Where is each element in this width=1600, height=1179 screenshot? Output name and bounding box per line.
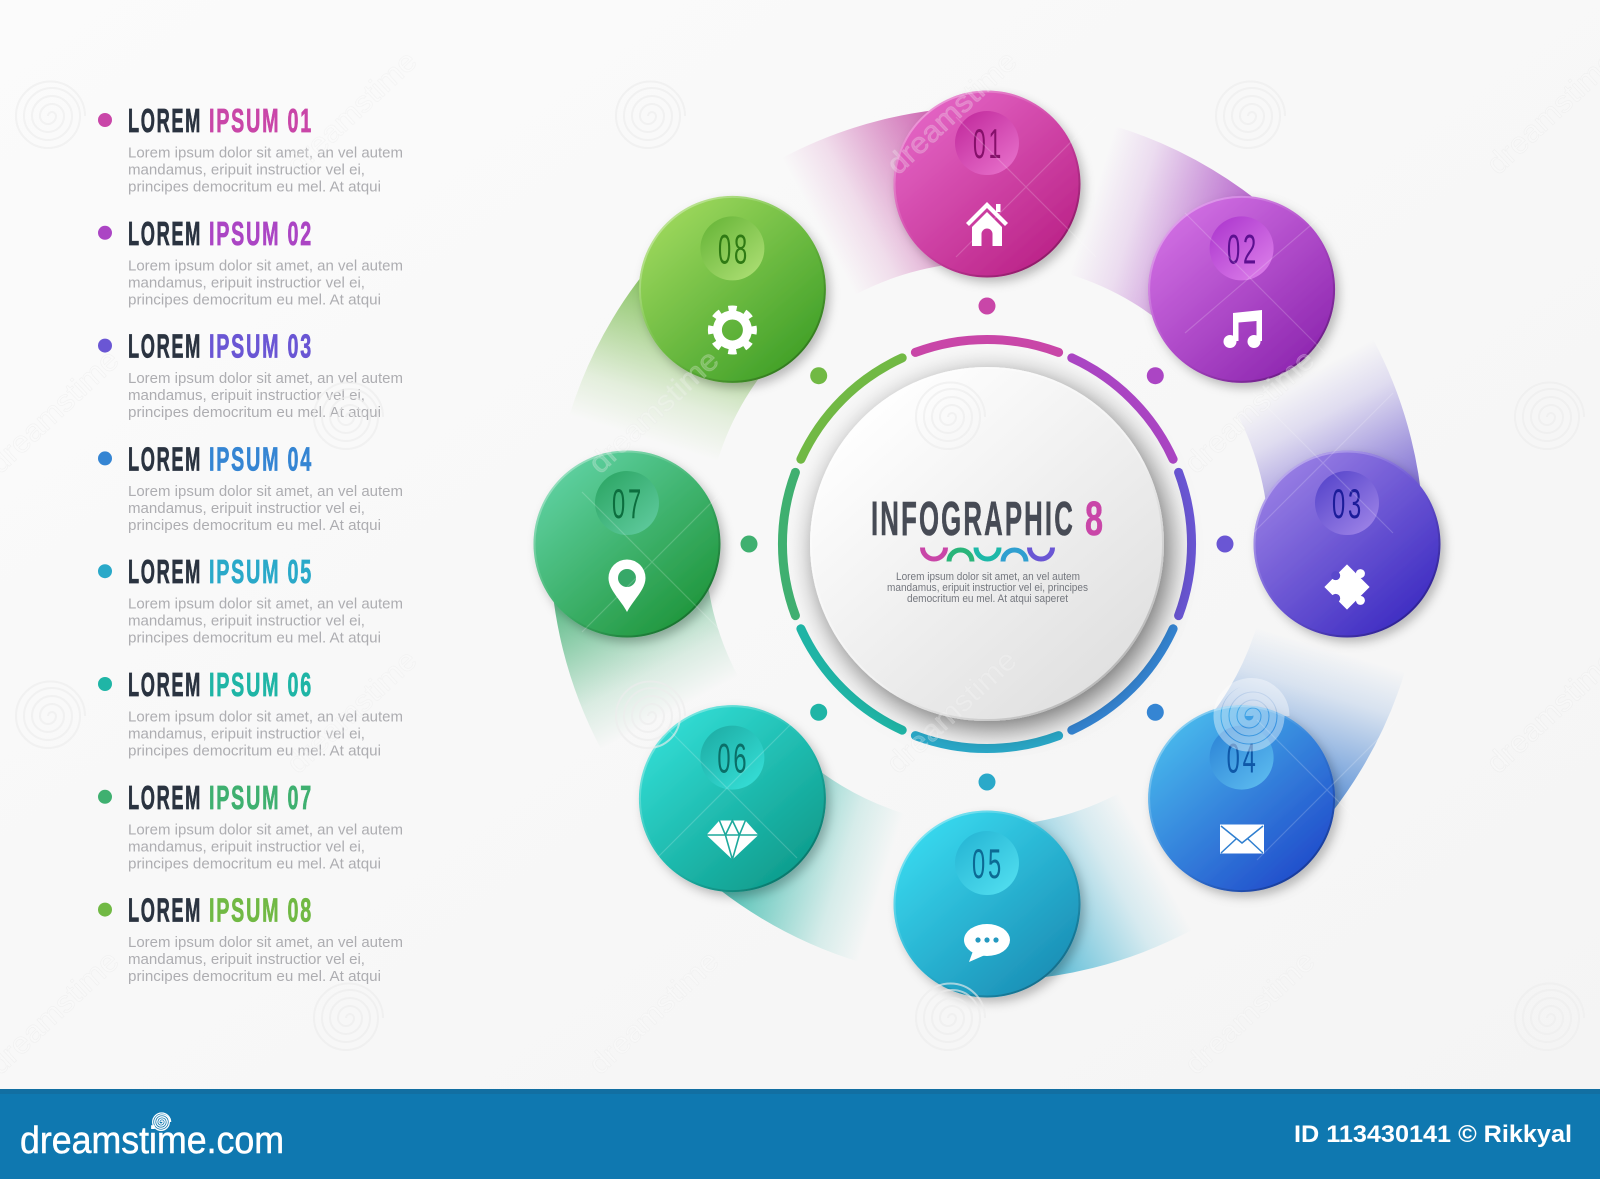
central title: INFOGRAPHIC [871, 493, 1075, 546]
circle 06: 06 [717, 735, 749, 782]
watermark spirals and stamps: dreamstime [582, 343, 725, 480]
circle 02: 02 [1227, 225, 1259, 272]
list item 07: IPSUM 07 [209, 779, 313, 816]
list item 06 [98, 666, 403, 760]
circle 02 [1148, 196, 1335, 383]
circle 01: 01 [973, 120, 1004, 167]
circle 08 [639, 196, 826, 383]
list item 08: principes democritum eu mel. At atqui [128, 969, 381, 985]
watermark spirals and stamps: dreamstime [1178, 944, 1321, 1081]
list item 03: mandamus, eripuit instructior vel ei, [128, 388, 365, 404]
footer logo: dreamstime.com [20, 1120, 284, 1162]
list item 03: Lorem ipsum dolor sit amet, an vel autem [128, 371, 403, 387]
list item 05: principes democritum eu mel. At atqui [128, 631, 381, 647]
list: eight text items [98, 102, 403, 985]
circle 03: 03 [1332, 480, 1364, 527]
central title: 8 [1085, 493, 1103, 546]
watermark spirals and stamps: dreamstime [280, 643, 423, 780]
list item 01: principes democritum eu mel. At atqui [128, 180, 381, 196]
list item 07: mandamus, eripuit instructior vel ei, [128, 839, 365, 855]
central body text [887, 571, 1089, 605]
footer bar [0, 1089, 1600, 1179]
list item 04: principes democritum eu mel. At atqui [128, 518, 381, 534]
watermark spirals and stamps: dreamstime [582, 944, 725, 1081]
list item 04 [98, 440, 403, 534]
list item 03: IPSUM 03 [209, 328, 313, 365]
list item 06: mandamus, eripuit instructior vel ei, [128, 726, 365, 742]
footer credit: ID 113430141 © Rikkyal [1294, 1121, 1572, 1148]
circle 01 [894, 90, 1080, 278]
list item 02: LOREM [128, 215, 202, 252]
list item 03: principes democritum eu mel. At atqui [128, 405, 381, 421]
list item 08: IPSUM 08 [209, 892, 313, 929]
list item 08: Lorem ipsum dolor sit amet, an vel autem [128, 935, 403, 951]
circle 04 [1148, 705, 1335, 892]
list item 07: principes democritum eu mel. At atqui [128, 856, 381, 872]
list item 03 [98, 328, 403, 421]
list item 08 [98, 892, 403, 985]
icon: diamond [706, 820, 758, 860]
list item 05: IPSUM 05 [209, 553, 313, 590]
list item 01: Lorem ipsum dolor sit amet, an vel autem [128, 146, 403, 162]
fading swoosh bands [533, 90, 1441, 998]
list item 07: Lorem ipsum dolor sit amet, an vel autem [128, 822, 403, 838]
circle 05 [894, 810, 1080, 998]
icon: map pin [608, 560, 646, 612]
list item 04: LOREM [128, 440, 202, 477]
circle 03 [1254, 450, 1440, 638]
central disc [811, 368, 1163, 720]
icon: house [966, 202, 1008, 246]
watermark spirals and stamps: dreamstime [880, 44, 1023, 181]
list item 01: mandamus, eripuit instructior vel ei, [128, 162, 365, 178]
circle 06 [639, 705, 826, 892]
list item 05: mandamus, eripuit instructior vel ei, [128, 614, 365, 630]
circle 04: 04 [1227, 735, 1259, 782]
list item 04: IPSUM 04 [209, 440, 313, 477]
list item 02: Lorem ipsum dolor sit amet, an vel autem [128, 258, 403, 274]
list item 02: mandamus, eripuit instructior vel ei, [128, 275, 365, 291]
list item 06: Lorem ipsum dolor sit amet, an vel autem [128, 710, 403, 726]
central body text: democritum eu mel. At atqui saperet [907, 593, 1068, 605]
list item 02 [98, 215, 403, 308]
circle 07: 07 [612, 480, 644, 527]
circle 08: 08 [718, 225, 750, 272]
central body text: Lorem ipsum dolor sit amet, an vel autem [896, 571, 1080, 583]
segmented ring [782, 339, 1192, 749]
wave ornament [922, 548, 1052, 562]
icon: envelope [1220, 824, 1264, 854]
circle 05: 05 [972, 840, 1004, 887]
list item 01 [98, 102, 403, 196]
list item 02: principes democritum eu mel. At atqui [128, 292, 381, 308]
list item 06: principes democritum eu mel. At atqui [128, 744, 381, 760]
icon: gear [711, 309, 753, 351]
list item 04: mandamus, eripuit instructior vel ei, [128, 501, 365, 517]
list item 05: Lorem ipsum dolor sit amet, an vel autem [128, 597, 403, 613]
circle 07 [534, 450, 720, 638]
list item 04: Lorem ipsum dolor sit amet, an vel autem [128, 484, 403, 500]
icon: music note [1224, 310, 1262, 348]
central body text: mandamus, eripuit instructior vel ei, principes [887, 582, 1089, 594]
list item 05 [98, 553, 403, 647]
list item 01: LOREM [128, 102, 202, 139]
list item 06: LOREM [128, 666, 202, 703]
list item 07: LOREM [128, 779, 202, 816]
connector dots [740, 298, 1234, 790]
list item 08: mandamus, eripuit instructior vel ei, [128, 952, 365, 968]
central title [871, 493, 1103, 546]
list item 02: IPSUM 02 [209, 215, 313, 252]
list item 07 [98, 779, 403, 872]
watermark spirals and stamps: dreamstime [1178, 343, 1321, 480]
watermark spirals and stamps: dreamstime [280, 44, 423, 181]
list item 08: LOREM [128, 892, 202, 929]
list item 01: IPSUM 01 [209, 102, 313, 139]
watermark spirals and stamps: dreamstime [880, 643, 1023, 780]
icon: chat bubble [964, 924, 1010, 962]
list item 06: IPSUM 06 [209, 666, 313, 703]
icon: puzzle piece [1318, 556, 1380, 618]
list item 05: LOREM [128, 553, 202, 590]
list item 03: LOREM [128, 328, 202, 365]
